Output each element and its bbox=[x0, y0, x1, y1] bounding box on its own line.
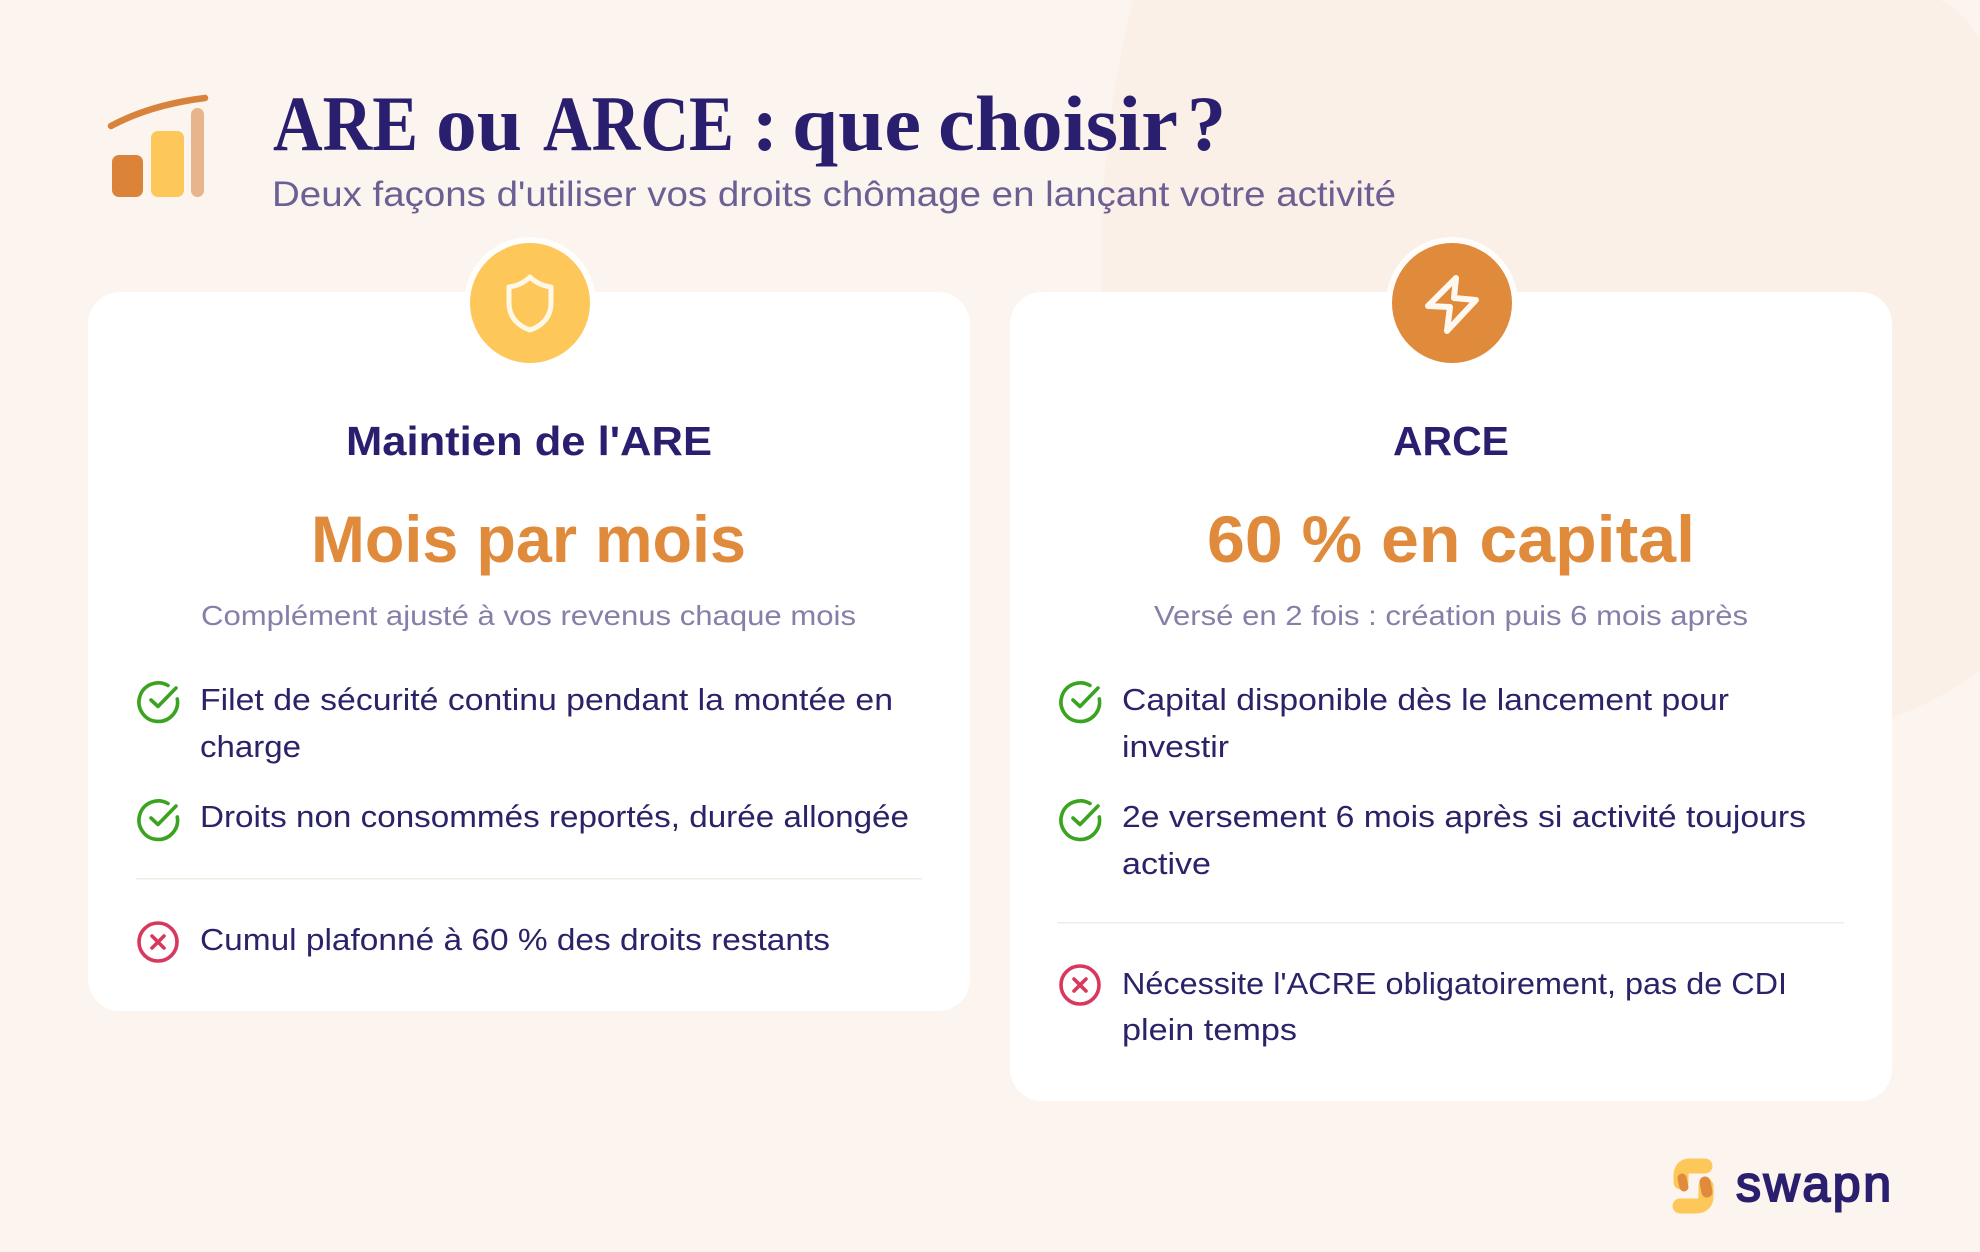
logo wordmark: swapn bbox=[1736, 1156, 1891, 1212]
con item: Nécessite l'ACRE obligatoirement, pas de CDI bbox=[1122, 966, 1787, 1001]
title: ARCE bbox=[543, 80, 734, 167]
con item: plein temps bbox=[1122, 1012, 1297, 1047]
title: choisir bbox=[938, 80, 1178, 167]
title: ou bbox=[436, 80, 522, 167]
pro item 2: active bbox=[1122, 846, 1211, 881]
panel: Maintien de l'ARE bbox=[88, 237, 970, 1011]
key figure: 60 % en capital bbox=[1207, 502, 1695, 576]
title bbox=[273, 80, 1226, 167]
pro item 1: charge bbox=[200, 729, 301, 764]
logo: swapn bbox=[1680, 1156, 1891, 1212]
icon: bar chart with trend line bbox=[111, 98, 205, 197]
title: : bbox=[752, 80, 778, 167]
pro item 2 bbox=[1061, 799, 1806, 881]
icon: shield badge bbox=[464, 237, 596, 369]
title: ? bbox=[1187, 80, 1226, 167]
description: Versé en 2 fois : création puis 6 mois après bbox=[1154, 600, 1748, 631]
title: que bbox=[792, 80, 921, 167]
pro item 1: investir bbox=[1122, 729, 1229, 764]
icon: lightning badge bbox=[1386, 237, 1518, 369]
subtitle: Deux façons d'utiliser vos droits chômage en lançant votre activité bbox=[272, 175, 1396, 214]
pro item 1 bbox=[1061, 682, 1729, 764]
con item: Cumul plafonné à 60 % des droits restants bbox=[200, 922, 830, 957]
logo mark bbox=[1680, 1166, 1707, 1206]
pro item 1: Capital disponible dès le lancement pour bbox=[1122, 682, 1729, 717]
pro item 1: Filet de sécurité continu pendant la montée en bbox=[200, 682, 893, 717]
key figure: Mois par mois bbox=[311, 502, 746, 576]
panel heading: ARCE bbox=[1393, 418, 1509, 464]
description: Complément ajusté à vos revenus chaque mois bbox=[201, 600, 856, 631]
panel heading: Maintien de l'ARE bbox=[346, 418, 712, 464]
pro item 2: 2e versement 6 mois après si activité toujours bbox=[1122, 799, 1806, 834]
con item bbox=[1061, 966, 1787, 1047]
panel: ARCE bbox=[1010, 237, 1892, 1101]
title: ARE bbox=[273, 80, 418, 167]
pro item 1 bbox=[139, 682, 893, 764]
pro item 2: Droits non consommés reportés, durée allongée bbox=[200, 799, 909, 834]
